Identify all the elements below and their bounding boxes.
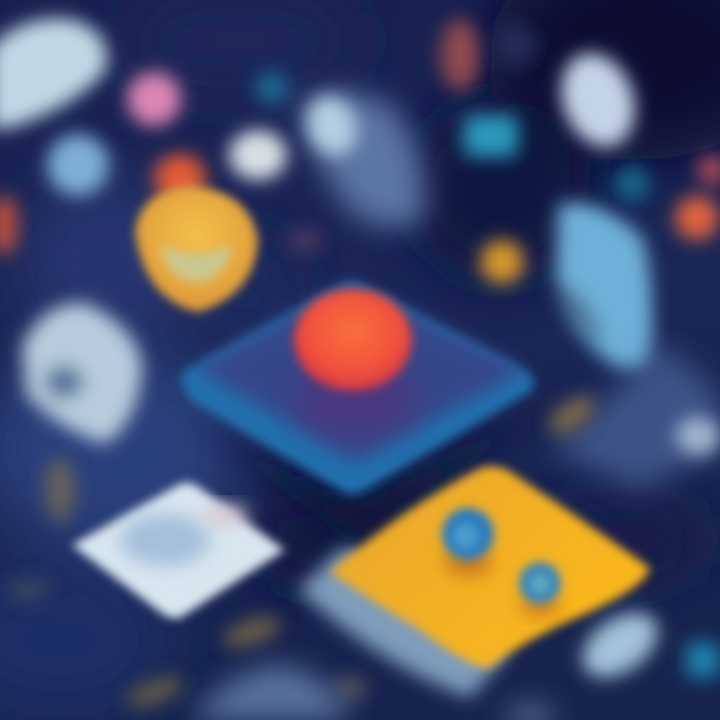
red shape left edge (0, 195, 18, 255)
central blue platform (180, 282, 534, 494)
yellow diamond panel (330, 466, 650, 668)
blue button small (519, 562, 561, 616)
device under yellow panel (298, 545, 510, 698)
blue button large (442, 508, 494, 576)
grey shape bottom centre (190, 665, 554, 720)
light spot right (676, 417, 720, 455)
white tablet bottom left (72, 483, 285, 618)
pale shape bottom right (571, 600, 669, 690)
red ball (294, 289, 412, 391)
white oval top right (549, 43, 647, 157)
cloud top left (0, 19, 107, 128)
teal dot right (614, 166, 650, 202)
grey-blue card top centre (300, 92, 425, 228)
white box left (22, 303, 142, 444)
white circle (229, 130, 287, 180)
pale blue circle (47, 134, 109, 196)
red shape top (440, 19, 480, 91)
orange dot centre right (480, 240, 524, 284)
central platform shadow (190, 410, 540, 540)
pink circle (127, 72, 181, 126)
cyan square bottom right (686, 642, 720, 678)
blue phone right (556, 203, 652, 372)
dark shape top (493, 23, 537, 67)
small brown marks (6, 228, 601, 714)
cyan square (464, 115, 518, 157)
teal small square top (255, 71, 289, 105)
right-side platform (550, 345, 720, 490)
orange and pink dots right (675, 155, 720, 240)
highlight on card (299, 90, 365, 162)
emoji face (135, 154, 258, 312)
